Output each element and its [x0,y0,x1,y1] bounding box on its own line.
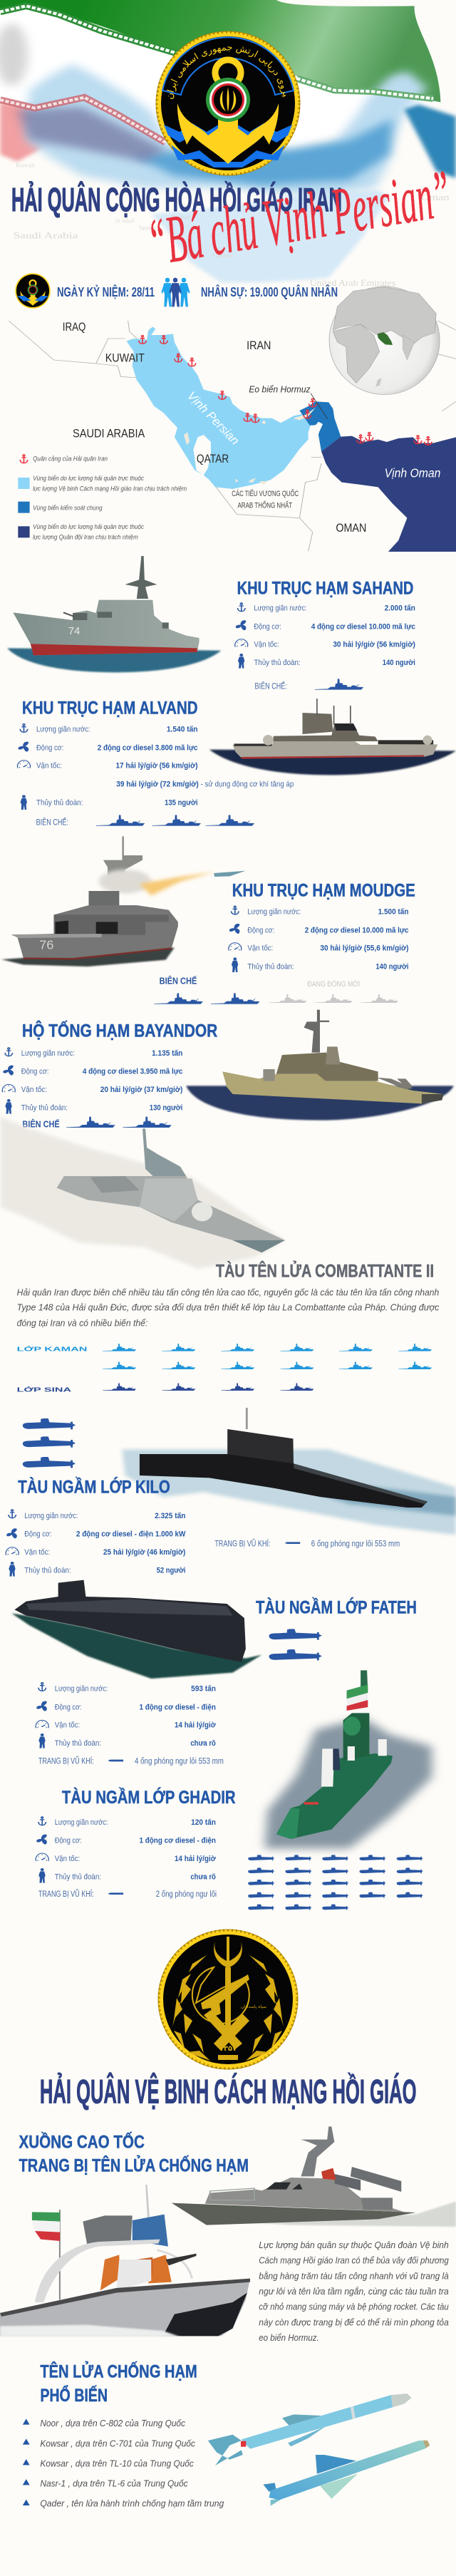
spec rows: 4 động cơ diesel 3.950 mã lực [83,1067,182,1076]
naval base markers [139,335,432,445]
spec rows: Vận tốc: [247,944,273,952]
spec rows: BIÊN CHẾ [160,975,197,986]
panel: missile boat Combattante II [0,1117,439,1468]
spec rows: 120 tấn [191,1818,216,1827]
map borders [9,321,456,551]
spec rows: 1.135 tấn [152,1049,182,1058]
speedboat heading: TRANG BỊ TÊN LỬA CHỐNG HẠM [19,2155,249,2175]
spec rows: 135 người [165,798,198,807]
speedboat heading: XUỒNG CAO TỐC [19,2131,145,2152]
spec rows: 14 hải lý/giờ [175,1721,216,1729]
missile list: Nasr-1 , dựa trên TL-6 của Trung Quốc [40,2478,188,2488]
spec rows: Động cơ: [21,1067,49,1076]
spec rows: Lượng giãn nước: [24,1511,78,1520]
small navy emblem [15,273,51,309]
faded base map labels [13,162,450,289]
panel: Ghadir submarine [36,1670,432,1910]
spec rows: 30 hải lý/giờ (55,6 km/giờ) [320,944,408,952]
IRGC emblem [158,1930,298,2069]
spec rows: 39 hải lý/giờ (72 km/giờ) [116,779,199,788]
spec rows: BIÊN CHẾ: [255,681,287,691]
spec rows: 52 người [157,1566,185,1575]
IRGC paragraph: eo biển Hormuz. [259,2332,319,2343]
spec rows: Vận tốc: [55,1721,80,1729]
personnel icons [161,278,190,306]
spec rows: 2 động cơ diesel 10.000 mã lực [305,925,409,934]
panel: destroyer Moudge [1,836,415,1004]
country labels [63,320,440,535]
missile list: Kowsar , dựa trên C-701 của Trung Quốc [40,2438,195,2448]
photo: Sahand [7,556,221,672]
photo: Sahand: 74 [68,625,80,637]
spec rows: BIÊN CHẾ [22,1118,60,1130]
spec rows: Vận tốc: [55,1854,80,1863]
country labels: SAUDI ARABIA [73,426,145,440]
map legend: Vùng biển kiểm soát chung [33,505,103,512]
spec rows: Lượng giãn nước: [21,1049,75,1058]
spec rows: 25 hải lý/giờ (46 km/giờ) [103,1547,185,1557]
intro paragraph: đóng tại Iran và có nhiều biến thể: [17,1318,147,1328]
spec rows: 2.325 tấn [155,1511,185,1520]
map legend: Vùng biển do lực lượng hải quân trực thuộc [33,523,145,531]
panel: destroyer Sahand [7,556,415,691]
Fateh submarine count [269,1629,322,1660]
title: HỘ TỐNG HẠM BAYANDOR [22,1020,217,1041]
missiles heading: PHỔ BIẾN [40,2385,108,2405]
map panel [9,287,456,552]
spec rows: Thủy thủ đoàn: [254,658,301,667]
spec rows: 2 ống phóng ngư lôi [156,1889,217,1899]
flag and map background [0,0,456,283]
country labels: IRAQ [63,320,86,334]
spec rows: Lượng giãn nước: [55,1684,108,1693]
faded base map labels: Al Jubail [115,218,135,224]
missiles heading: TÊN LỬA CHỐNG HẠM [40,2361,197,2381]
spec rows [6,1510,186,1577]
spec rows: 14 hải lý/giờ [175,1854,216,1863]
country labels: QATAR [197,452,229,465]
country labels: CÁC TIỂU VƯƠNG QUỐC [232,488,299,498]
strait of hormuz zone [299,401,341,451]
speedboat heading [19,2131,249,2175]
photo: Moudge: 76 [39,938,54,952]
spec rows: 20 hải lý/giờ (37 km/giờ) [100,1085,182,1094]
spec rows: 30 hải lý/giờ (56 km/giờ) [333,640,415,649]
spec rows: 17 hải lý/giờ (56 km/giờ) [115,761,198,770]
photo: patrol boat crew [0,2185,250,2337]
navy emblem [155,31,301,175]
IRGC emblem text: سپاه پاسداران [241,2004,266,2009]
spec rows: Vận tốc: [36,761,62,770]
missiles heading [40,2361,197,2405]
country labels: KUWAIT [105,351,145,364]
spec rows: 140 người [383,658,415,667]
Kaman class fleet: LỚP KAMAN [17,1345,87,1353]
missile list: Noor , dựa trên C-802 của Trung Quốc [40,2418,185,2428]
Fateh armament: TRANG BỊ VŨ KHÍ: [38,1756,94,1766]
spec rows [36,1682,216,1748]
intro paragraph [17,1287,439,1328]
spec rows: 4 động cơ diesel 10.000 mã lực [311,622,415,631]
qatar peninsula [193,435,211,475]
map legend: lực lượng Quân đội Iran chịu trách nhiệm [33,534,138,541]
map legend [18,455,187,541]
spec rows: 2 động cơ diesel - điện 1.000 kW [76,1530,186,1538]
anniversary text: NGÀY KỶ NIỆM: 28/11 [57,284,155,299]
spec rows: Động cơ: [24,1530,52,1538]
spec rows: 140 người [375,962,408,971]
faded base map labels: Saudi Arabia [13,231,78,241]
spec rows: chưa rõ [190,1738,216,1748]
spec rows [17,723,294,827]
spec rows: Thủy thủ đoàn: [55,1738,101,1748]
Ghadir submarine count [248,1855,423,1910]
panel: frigate Bayandor [2,1010,454,1130]
faded base map labels: Qatar [212,252,234,259]
spec rows: BIÊN CHẾ: [36,818,68,827]
arabic emblem text: نیروی دریایی ارتش جمهوری اسلامی ایران [167,46,286,99]
IRGC year: ۱۳۵۷ [219,2045,237,2053]
faded base map labels: Dammam [139,225,157,231]
missile illustration: upper [208,2394,412,2466]
spec rows: Lượng giãn nước: [247,907,301,916]
Fateh armament: 4 ống phóng ngư lôi 553 mm [135,1756,224,1766]
spec rows: Vận tốc: [254,640,279,649]
photo: Combattante [0,1117,285,1269]
Kaman class fleet [17,1344,432,1369]
spec rows: Thủy thủ đoàn: [247,962,294,971]
spec rows: 1 động cơ diesel - điện [140,1836,216,1845]
title: TÀU NGẦM LỚP KILO [18,1476,170,1497]
missile list: Qader , tên lửa hành trình chống hạm tầm trung [40,2498,224,2508]
spec rows: Vận tốc: [24,1547,50,1557]
spec rows: 130 người [150,1103,182,1112]
spec rows: 2 động cơ diesel 3.800 mã lực [98,743,198,752]
spec rows: Động cơ: [36,743,63,752]
hormuz leader line [311,393,328,418]
spec rows: Vận tốc: [21,1085,47,1094]
spec rows: Lượng giãn nước: [254,604,307,612]
spec rows: Thủy thủ đoàn: [24,1566,71,1575]
Kilo armament [214,1539,400,1548]
gulf name label: Vịnh Persian [185,389,242,448]
panel: IRGC navy [0,2072,456,2343]
spec rows: 1.540 tấn [167,725,198,733]
photo: missile speedboat [172,2126,456,2227]
Kilo submarine count [23,1418,76,1468]
photo: Bayandor [186,1010,454,1120]
personnel text: NHÂN SỰ: 19.000 QUÂN NHÂN [201,284,338,299]
panel: anti-ship missiles [23,2361,430,2508]
photo: Kilo [122,1408,456,1535]
map legend: Vùng biển do lực lượng hải quân trực thuộc [33,475,145,483]
Sina class fleet [17,1383,314,1393]
IRGC paragraph [259,2240,449,2343]
photo: Ghadir [264,1670,432,1848]
faded base map labels: Oman [421,192,450,203]
spec rows: Động cơ: [55,1836,82,1845]
spec rows: ĐANG ĐÓNG MỚI [307,979,360,989]
country labels: OMAN [336,521,366,535]
Kilo armament: TRANG BỊ VŨ KHÍ: [214,1539,271,1548]
map legend: Quân cảng của Hải quân Iran [33,455,108,463]
spec rows: 1.500 tấn [378,907,408,916]
country labels: IRAN [247,339,271,352]
faded base map labels: Kuwait [16,162,35,169]
title: KHU TRỤC HẠM ALVAND [22,697,198,718]
Kilo armament: 6 ống phóng ngư lôi 553 mm [311,1539,400,1548]
spec rows [154,906,409,1004]
country labels: ARAB THỐNG NHẤT [237,500,292,510]
spec rows: Động cơ: [55,1702,82,1711]
spec rows: chưa rõ [190,1872,216,1881]
persian gulf [127,326,311,489]
spec rows: 1 động cơ diesel - điện [140,1702,216,1711]
panel: Fateh submarine [11,1580,417,1748]
spec rows: Thủy thủ đoàn: [21,1103,68,1112]
spec rows: 2.000 tấn [385,604,415,612]
panel: destroyer Alvand [17,697,456,827]
Fateh armament [38,1756,224,1766]
Sina class fleet: LỚP SINA [17,1386,71,1393]
missile list [23,2418,224,2508]
spec rows: Lượng giãn nước: [55,1818,108,1827]
photo: Fateh [11,1580,261,1679]
photo: Moudge [1,836,246,967]
spec rows: Động cơ: [254,622,281,631]
missile list: Kowsar , dựa trên TL-10 của Trung Quốc [40,2458,194,2468]
spec rows: 593 tấn [191,1684,216,1693]
spec rows: Động cơ: [247,925,274,934]
locator globe [329,287,440,395]
spec rows: Thủy thủ đoàn: [55,1872,101,1881]
spec rows: Lượng giãn nước: [36,725,90,733]
missile illustration: lower [263,2440,430,2506]
spec rows: - sử dụng động cơ khí tăng áp [201,779,294,788]
spec rows: Thủy thủ đoàn: [36,798,83,807]
panel: Kilo submarine [6,1408,456,1577]
country labels: Eo biển Hormuz [249,384,311,394]
gulf of oman [321,436,456,552]
spec rows [2,1048,182,1130]
photo: Alvand [209,699,456,775]
spec rows: TRANG BỊ VŨ KHÍ: [38,1889,94,1899]
title: TÀU NGẦM LỚP GHADIR [62,1787,236,1807]
map legend: lực lượng Vệ binh Cách mạng Hồi giáo Iran chịu trách nhiệm [33,485,187,493]
header panel [0,0,456,309]
faded base map labels: Bahrain [171,214,193,221]
spec rows [235,603,415,691]
faded base map labels: United Arab Emirates [310,278,395,289]
spec rows [36,1817,217,1899]
